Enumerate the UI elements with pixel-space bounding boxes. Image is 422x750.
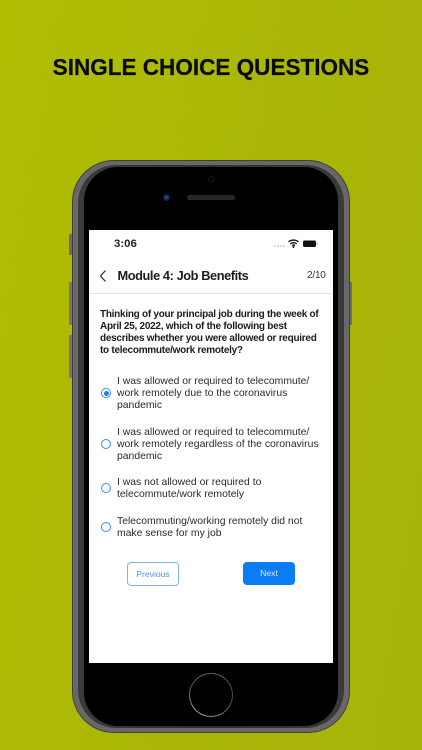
option 3 text: telecommute/work remotely [117,489,244,500]
option 2 text [117,426,319,462]
radio [101,439,111,449]
screen heading: Module 4: Job Benefits [118,268,248,283]
question text: Thinking of your principal job during the week of [100,309,318,320]
option 1 text: I was allowed or required to telecommute/ [117,376,309,386]
sensor [208,176,215,183]
home button [189,673,233,717]
question text: to telecommute/work remotely? [100,345,243,356]
previous button: Previous [136,569,170,579]
black bezel [84,167,338,726]
option 1 [101,376,310,411]
option 2 text: I was allowed or required to telecommute/ [117,426,309,438]
back chevron [100,270,106,282]
question text: describes whether you were allowed or required [100,333,317,344]
option 3 text: I was not allowed or required to [117,477,261,488]
option 3 [101,477,261,500]
radio [101,483,111,493]
option 3 text [117,477,261,500]
speaker [187,195,235,200]
title: SINGLE CHOICE QUESTIONS [53,54,369,80]
option 2 text: pandemic [117,451,162,462]
front camera [163,194,170,201]
option 2 [101,426,319,462]
option 1 text: pandemic [117,400,162,411]
previous button [127,562,179,586]
phone mockup [69,160,352,733]
option 4 text [117,516,302,539]
progress counter: 2/10 [307,270,326,281]
status icons [274,239,318,248]
side buttons [69,234,352,378]
option 1 text: work remotely due to the coronavirus [117,388,287,399]
option 4 [101,516,302,539]
radio selected [101,388,111,398]
radio [101,522,111,532]
next button: Next [260,568,278,578]
option 1 text [117,376,310,411]
next button [243,562,295,585]
question text: April 25, 2022, which of the following best [100,321,287,332]
phone body [72,160,350,733]
app screen [89,230,333,663]
inner frame [78,165,344,728]
option 4 text: make sense for my job [117,528,222,539]
status time: 3:06 [114,238,137,250]
option 4 text: Telecommuting/working remotely did not [117,516,302,526]
question text [100,309,319,356]
option 2 text: work remotely regardless of the coronavirus [117,439,319,450]
